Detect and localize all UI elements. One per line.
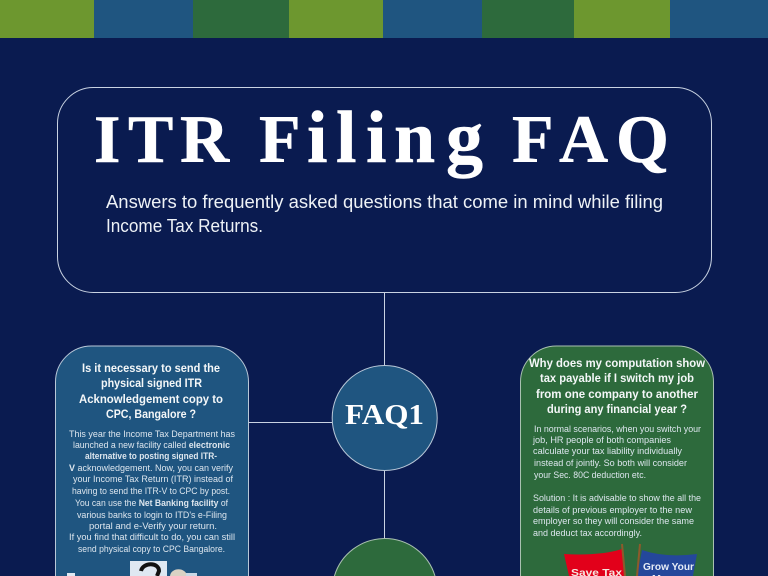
question heading bbox=[79, 363, 223, 421]
subtitle bbox=[106, 192, 663, 236]
connector lines bbox=[248, 292, 384, 539]
question heading: tax payable if I switch my job bbox=[540, 373, 694, 385]
answer text: launched a new facility called electronic bbox=[73, 440, 231, 451]
answer text: portal and e-Verify your return. bbox=[89, 521, 217, 532]
panel: title box bbox=[58, 88, 712, 292]
icon: question mark card and figures bbox=[67, 561, 197, 576]
FAQ1 circle bbox=[332, 366, 437, 470]
icon: blue flag Grow Your Money: Grow Your bbox=[643, 561, 694, 573]
answer text: This year the Income Tax Department has bbox=[69, 429, 235, 440]
title: ITR Filing FAQ bbox=[94, 97, 669, 179]
answer text: having to send the ITR-V to CPC by post. bbox=[72, 486, 230, 497]
answer text: alternative to posting signed ITR- bbox=[85, 451, 217, 462]
answer text: instead of jointly. So both will consider bbox=[534, 458, 688, 469]
answer text: Solution : It is advisable to show the all the bbox=[533, 493, 701, 504]
question heading: physical signed ITR bbox=[101, 378, 203, 390]
answer text: calculate your tax liability individually bbox=[533, 446, 682, 457]
answer text: V acknowledgement. Now, you can verify bbox=[69, 463, 233, 474]
subtitle: Income Tax Returns. bbox=[106, 216, 263, 236]
question heading: Is it necessary to send the bbox=[82, 363, 220, 375]
question heading: from one company to another bbox=[536, 389, 699, 401]
answer text: your Sec. 80C deduction etc. bbox=[534, 470, 646, 481]
icon: red flag Save Tax bbox=[564, 544, 625, 576]
answer text: If you find that difficult to do, you can still bbox=[69, 532, 235, 543]
question heading: during any financial year ? bbox=[547, 404, 687, 416]
answer text bbox=[532, 424, 702, 539]
answer text: and deduct tax accordingly. bbox=[533, 528, 642, 539]
subtitle: Answers to frequently asked questions that come in mind while filing bbox=[106, 192, 663, 212]
answer text bbox=[69, 429, 235, 555]
question heading: Why does my computation show bbox=[529, 358, 705, 370]
answer text: details of previous employer to the new bbox=[533, 505, 692, 516]
icon: blue flag Grow Your Money bbox=[637, 544, 697, 576]
question heading: CPC, Bangalore ? bbox=[106, 409, 196, 421]
FAQ1 circle: FAQ1 bbox=[345, 400, 424, 431]
answer text: In normal scenarios, when you switch your bbox=[534, 424, 702, 435]
answer text: send physical copy to CPC Bangalore. bbox=[78, 544, 225, 555]
answer text: your Income Tax Return (ITR) instead of bbox=[73, 474, 233, 485]
answer text: You can use the Net Banking facility of bbox=[75, 498, 228, 509]
answer text: job, HR people of both companies bbox=[532, 435, 671, 446]
question heading: Acknowledgement copy to bbox=[79, 394, 223, 406]
panel: FAQ left card bbox=[56, 346, 248, 576]
panel: FAQ right card bbox=[520, 346, 714, 576]
answer text: employer so they will consider the same bbox=[533, 516, 694, 527]
answer text: various banks to login to ITD's e-Filing bbox=[77, 510, 227, 521]
FAQ2 circle bbox=[334, 539, 435, 576]
question heading bbox=[529, 358, 705, 416]
top colour strip bbox=[0, 0, 768, 38]
